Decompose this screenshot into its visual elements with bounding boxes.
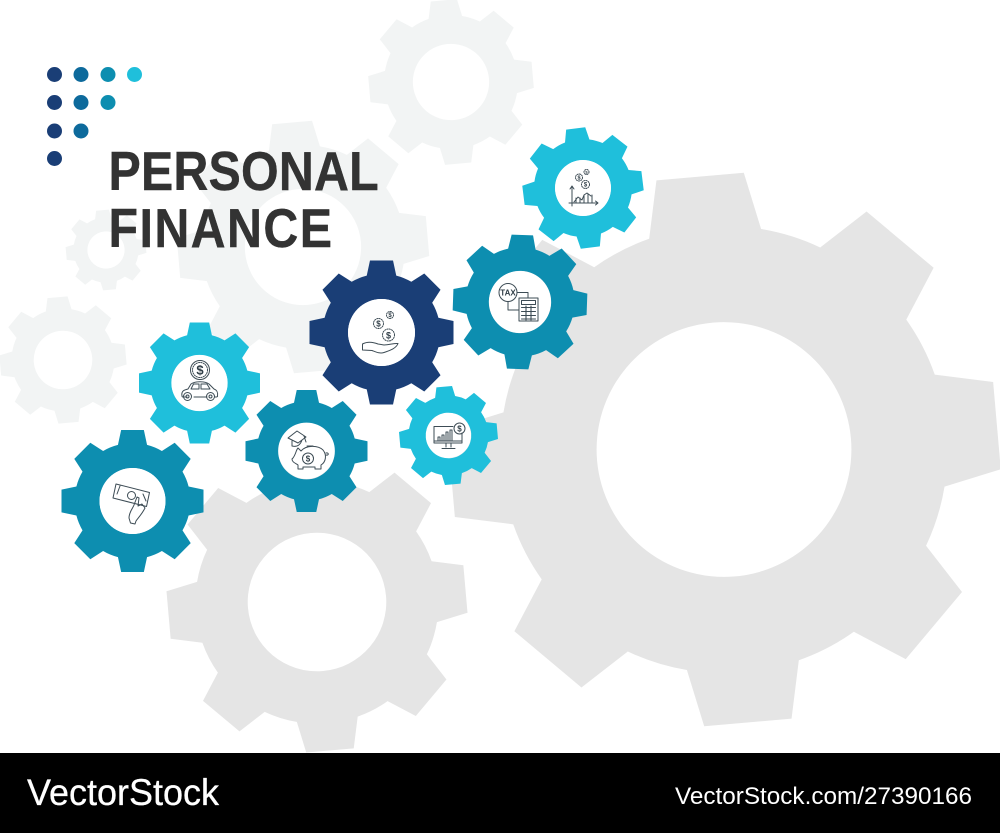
icon: piggy bank with graduation cap: $ [306, 454, 311, 464]
gear: monitor with chart [395, 382, 502, 489]
gear: tax calculator [451, 233, 589, 371]
icon: hand holding banknote [113, 484, 150, 524]
footer brand: VectorStock [27, 772, 219, 813]
pale background gear: top [362, 0, 540, 171]
pale background gear: small left [63, 207, 149, 293]
icon: open hand with coins: $ [386, 330, 391, 340]
icon: tax and calculator: TAX [500, 288, 516, 298]
icon: monitor with bar chart and coin: $ [457, 424, 462, 434]
footer url: VectorStock.com/27390166 [675, 783, 972, 810]
title [108, 140, 379, 259]
icon: growth chart with coins: $ [577, 176, 581, 182]
gear: chart with coins [516, 121, 650, 255]
gear: car with coin [139, 322, 260, 444]
pale background gear: behind title [168, 112, 438, 382]
large grey gear [427, 153, 1000, 746]
icon: open hand with coins [362, 312, 398, 353]
title: FINANCE [108, 197, 332, 259]
gear: hand with coins [310, 260, 454, 404]
icon: growth chart with coins [569, 170, 598, 206]
decorative dot grid [47, 67, 142, 166]
icon: growth chart with coins: $ [584, 183, 588, 189]
medium grey gear [156, 441, 478, 763]
gear: hand holding banknote [62, 430, 204, 572]
icon: open hand with coins: $ [388, 313, 392, 319]
title: PERSONAL [108, 140, 379, 202]
footer bar [0, 753, 1000, 833]
icon: growth chart with coins: $ [585, 170, 588, 175]
icon: open hand with coins: $ [376, 319, 381, 328]
icon: car with dollar coin: $ [196, 362, 204, 378]
pale background gear: far left [0, 292, 131, 428]
gear: piggy bank [246, 390, 368, 512]
